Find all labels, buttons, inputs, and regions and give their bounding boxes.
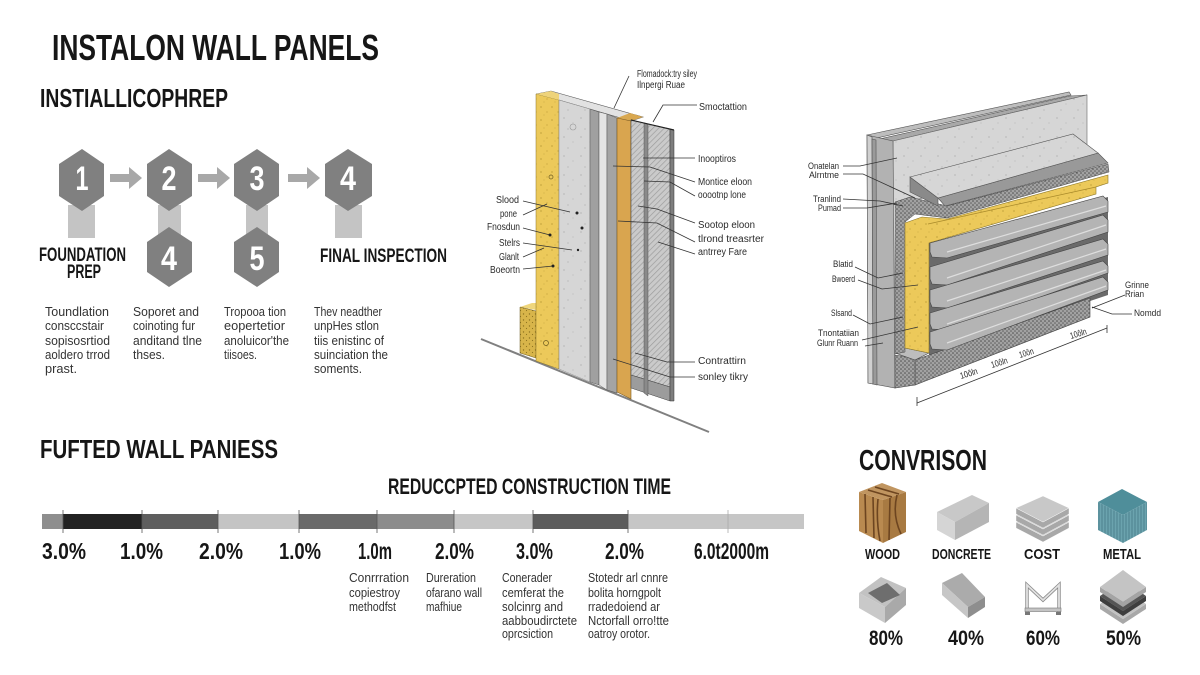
callouts: Blatid <box>833 259 853 269</box>
timeline note 3: Conerader <box>502 571 552 585</box>
step text column 4: tiis enistinc of <box>314 333 384 348</box>
step text column 3: Tropooa tion <box>224 304 286 319</box>
title: INSTALON WALL PANELS <box>52 27 379 68</box>
timeline note 1: copiestroy <box>349 586 401 600</box>
icon: stacked slabs <box>1016 496 1069 542</box>
callouts: Glunr Ruann <box>817 338 858 348</box>
step text column 2: coinoting fur <box>133 318 196 333</box>
material labels <box>865 546 1141 563</box>
foundation block <box>520 303 536 358</box>
yellow insulation layer <box>536 91 559 369</box>
diagram: wall section <box>481 69 765 432</box>
step text column 4 <box>314 304 388 376</box>
callouts: left: Stelrs <box>499 238 520 249</box>
callouts: left <box>487 195 584 276</box>
step text column 1: Toundlation <box>45 304 109 319</box>
step text column 1: aoldero trrod <box>45 347 110 362</box>
step text column 2 <box>133 304 202 362</box>
hexagon step 4 <box>325 149 372 211</box>
percentage values: 80% <box>869 627 903 650</box>
icon: layered composite <box>1100 570 1146 624</box>
timeline note 4: Nctorfall orro!tte <box>588 614 669 628</box>
material labels: DONCRETE <box>932 546 991 563</box>
timeline values <box>42 538 769 564</box>
timeline note 2: ofarano wall <box>426 586 482 600</box>
callouts: left: Fnosdun <box>487 222 520 233</box>
hexagon step 3 <box>234 149 279 211</box>
callouts: Bwoerd <box>832 274 855 284</box>
timeline values: 1.0% <box>120 538 163 564</box>
material labels: WOOD <box>865 546 900 563</box>
connector bars <box>68 205 362 238</box>
main concrete slab <box>893 95 1087 205</box>
timeline note 2: Dureration <box>426 571 476 585</box>
timeline note 3: cemferat the <box>502 586 564 600</box>
callouts: right: ooootnp lone <box>698 190 746 201</box>
panel: material comparison <box>859 483 1147 650</box>
step text column 3 <box>224 304 289 362</box>
percentage values: 50% <box>1106 627 1141 650</box>
timeline note 4: Stotedr arl cnnre <box>588 571 668 585</box>
step text column 2: Soporet and <box>133 304 199 319</box>
callouts: right: antrrey Fare <box>698 247 747 258</box>
hexagon lower 5: 5 <box>250 240 264 278</box>
hexagon step 2: 2 <box>162 160 176 198</box>
callouts: Tnontatiian <box>818 328 859 338</box>
yellow insulation <box>905 175 1108 353</box>
timeline values: 1.0% <box>279 538 321 564</box>
hexagon lower 5 <box>234 227 279 287</box>
hexagon step 4: 4 <box>340 160 356 198</box>
step label: foundation prep <box>39 245 126 283</box>
ground line <box>481 339 709 432</box>
material labels: COST <box>1024 546 1060 563</box>
hexagon step 3: 3 <box>250 160 264 198</box>
step text column 1: consccstair <box>45 318 105 333</box>
step label: foundation prep: FOUNDATION <box>39 245 126 266</box>
timeline bar <box>42 510 804 533</box>
top cap <box>910 134 1108 206</box>
callouts: right: sonley tikry <box>698 372 748 383</box>
timeline note 3: oprcsiction <box>502 627 553 641</box>
top face <box>536 91 643 121</box>
hexagon lower 4: 4 <box>161 240 177 278</box>
callouts: right: tlrond treasrter <box>698 234 765 245</box>
timeline note 4: bolita horngpolt <box>588 586 661 600</box>
panel: installation steps <box>39 149 447 376</box>
concrete layer <box>559 100 590 382</box>
timeline values: 2.0% <box>435 538 474 564</box>
hexagon step 1 <box>59 149 104 211</box>
timeline note 1: Conrrration <box>349 571 409 585</box>
callouts: right: Montice eloon <box>698 177 752 188</box>
timeline values: 3.0% <box>516 538 553 564</box>
icon: metal cube <box>1098 489 1147 543</box>
callouts: right: Inooptiros <box>698 154 736 165</box>
callouts: Alrntme <box>809 170 839 180</box>
dimension line: 10ôln <box>990 355 1009 370</box>
step text column 1 <box>45 304 110 376</box>
step label: final inspection: FINAL INSPECTION <box>320 246 447 267</box>
heading: conversion: CONVRISON <box>859 445 987 477</box>
callouts: left: Slood <box>496 195 519 206</box>
step text column 3: anoluicor'the <box>224 333 289 348</box>
arrow: step 1 to 2 <box>110 167 142 189</box>
heading: installation steps: INSTIALLICOPHREP <box>40 83 228 113</box>
icon: wood cube <box>859 483 906 543</box>
hexagon lower 4 <box>147 227 192 287</box>
back layers <box>867 92 1087 141</box>
step text column 4: Thev neadther <box>314 304 383 319</box>
timeline note 4: rradedoiend ar <box>588 600 660 614</box>
timeline values: 2.0% <box>199 538 243 564</box>
callouts: left: Glanlt <box>499 252 519 263</box>
step text column 1: sopisosrtiod <box>45 333 110 348</box>
hexagon step 1: 1 <box>76 160 88 198</box>
percentage values: 40% <box>948 627 984 650</box>
callouts: left: pone <box>500 209 517 220</box>
heading: reduced construction time: REDUCCPTED CONSTRUCTION TIME <box>388 474 671 499</box>
callouts: Grinne <box>1125 280 1149 290</box>
step text column 3: eopertetior <box>224 318 286 333</box>
timeline note 3: aabboudirctete <box>502 614 577 628</box>
icon: concrete block <box>937 495 989 540</box>
timeline note 1: methodfst <box>349 600 396 614</box>
percentage values: 60% <box>1026 627 1060 650</box>
hatched panel <box>631 120 674 401</box>
callouts: left: Boeortn <box>490 265 520 276</box>
diagram: slatted panel <box>808 92 1161 406</box>
icon: hollow block <box>859 577 906 623</box>
step text column 2: anditand tlne <box>133 333 202 348</box>
step text column 2: thses. <box>133 347 165 362</box>
callouts: Rrian <box>1125 289 1144 299</box>
timeline values: 2.0% <box>605 538 644 564</box>
timeline note 4: oatroy orotor. <box>588 627 650 641</box>
slats <box>930 196 1108 350</box>
step text column 1: prast. <box>45 361 77 376</box>
callouts <box>808 158 1161 348</box>
icon: steel frame <box>1025 585 1061 615</box>
dimension line: 10ôln <box>959 366 979 381</box>
percentage values <box>869 627 1141 650</box>
callouts: Pumad <box>818 203 841 213</box>
timeline values: 6.0t2000m <box>694 538 769 564</box>
callouts: Nomdd <box>1134 308 1161 318</box>
slat backing <box>929 197 1108 355</box>
dimension line <box>917 325 1107 406</box>
step text column 3: tiisoes. <box>224 347 257 362</box>
icon: solid brick <box>942 573 985 618</box>
step text column 4: suinciation the <box>314 347 388 362</box>
heading: fitted wall panels: FUFTED WALL PANIESS <box>40 434 278 464</box>
dimension line: 10ôln <box>1069 326 1088 341</box>
timeline values: 3.0% <box>42 538 86 564</box>
callouts: Tranlind <box>813 194 841 204</box>
step label: foundation prep: PREP <box>67 262 101 283</box>
callouts: Slsand <box>831 308 852 318</box>
timeline note 1 <box>349 571 409 614</box>
timeline note 3 <box>502 571 577 641</box>
step text column 4: unpHes stlon <box>314 318 379 333</box>
timeline note 4 <box>588 571 669 641</box>
step text column 4: soments. <box>314 361 362 376</box>
dimension line: 10ôn <box>1018 346 1035 360</box>
speckled layer <box>895 164 1109 354</box>
material labels: METAL <box>1103 546 1141 563</box>
callouts: Onatelan <box>808 161 839 171</box>
callouts: right <box>613 69 765 383</box>
timeline note 3: solcinrg and <box>502 600 563 614</box>
left column <box>867 135 895 388</box>
hexagon step 2 <box>147 149 192 211</box>
callouts: right: Smoctattion <box>699 102 747 113</box>
timeline note 2: mafhiue <box>426 600 462 614</box>
layered strips <box>590 109 617 393</box>
callouts: right: Contrattirn <box>698 356 746 367</box>
arrow: step 2 to 3 <box>198 167 230 189</box>
timeline values: 1.0m <box>358 538 392 564</box>
callouts: right: Ilnpergi Ruae <box>637 80 685 91</box>
base course <box>895 298 1090 388</box>
orange board <box>617 118 631 399</box>
timeline note 2 <box>426 571 482 614</box>
arrow: step 3 to 4 <box>288 167 320 189</box>
callouts: right: Sootop eloon <box>698 220 755 231</box>
callouts: right: Flomadock:try siley <box>637 69 697 80</box>
